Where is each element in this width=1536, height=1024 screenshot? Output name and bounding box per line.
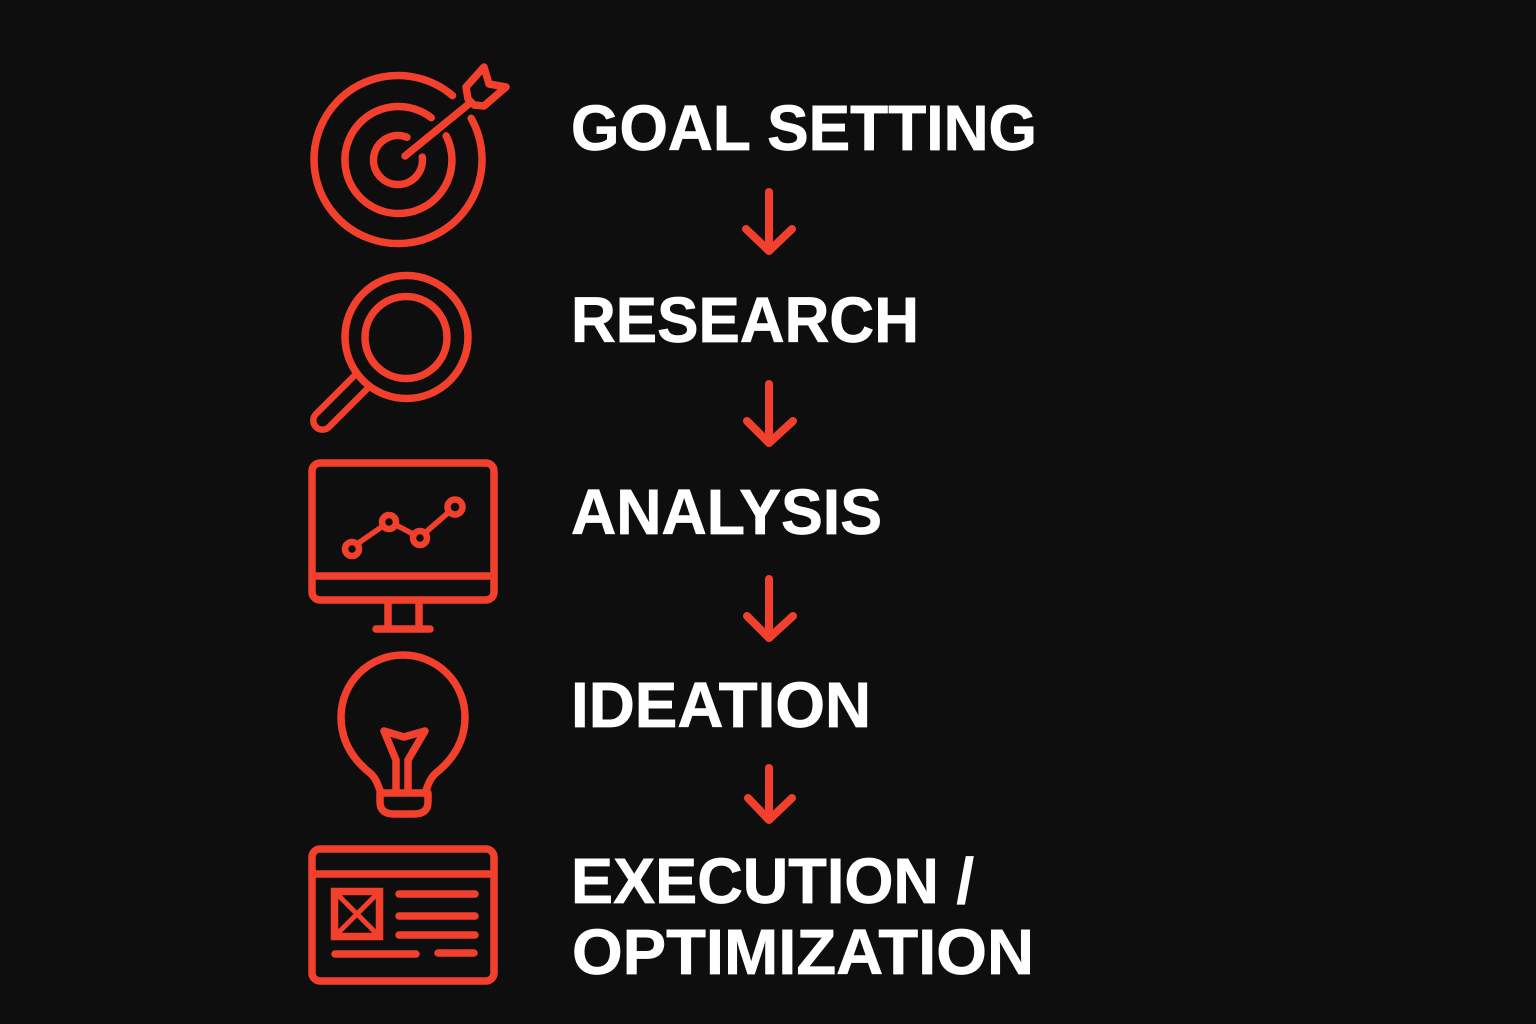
icon: web page layout (312, 849, 494, 981)
step 5: execution and optimization (312, 845, 1034, 988)
icon: target with arrow (314, 67, 506, 244)
heading: execution / optimization: OPTIMIZATION (572, 916, 1034, 988)
icon: light bulb (341, 655, 465, 814)
step 4: ideation (341, 655, 871, 814)
heading: execution / optimization (571, 845, 1034, 988)
heading: ideation: IDEATION (571, 669, 871, 741)
step 3: analysis (312, 463, 882, 629)
arrow: analysis to ideation (747, 579, 793, 638)
step 1: goal setting (314, 67, 1037, 244)
arrow: research to analysis (747, 384, 793, 443)
icon: magnifying glass (313, 276, 468, 430)
heading: analysis: ANALYSIS (571, 476, 882, 548)
heading: goal setting: GOAL SETTING (571, 92, 1037, 164)
step 2: research (313, 276, 919, 430)
arrow: ideation to execution (748, 768, 792, 820)
heading: execution / optimization: EXECUTION / (571, 845, 974, 917)
arrow: goal setting to research (746, 192, 792, 251)
heading: research: RESEARCH (571, 284, 919, 356)
icon: monitor with line chart (312, 463, 494, 629)
